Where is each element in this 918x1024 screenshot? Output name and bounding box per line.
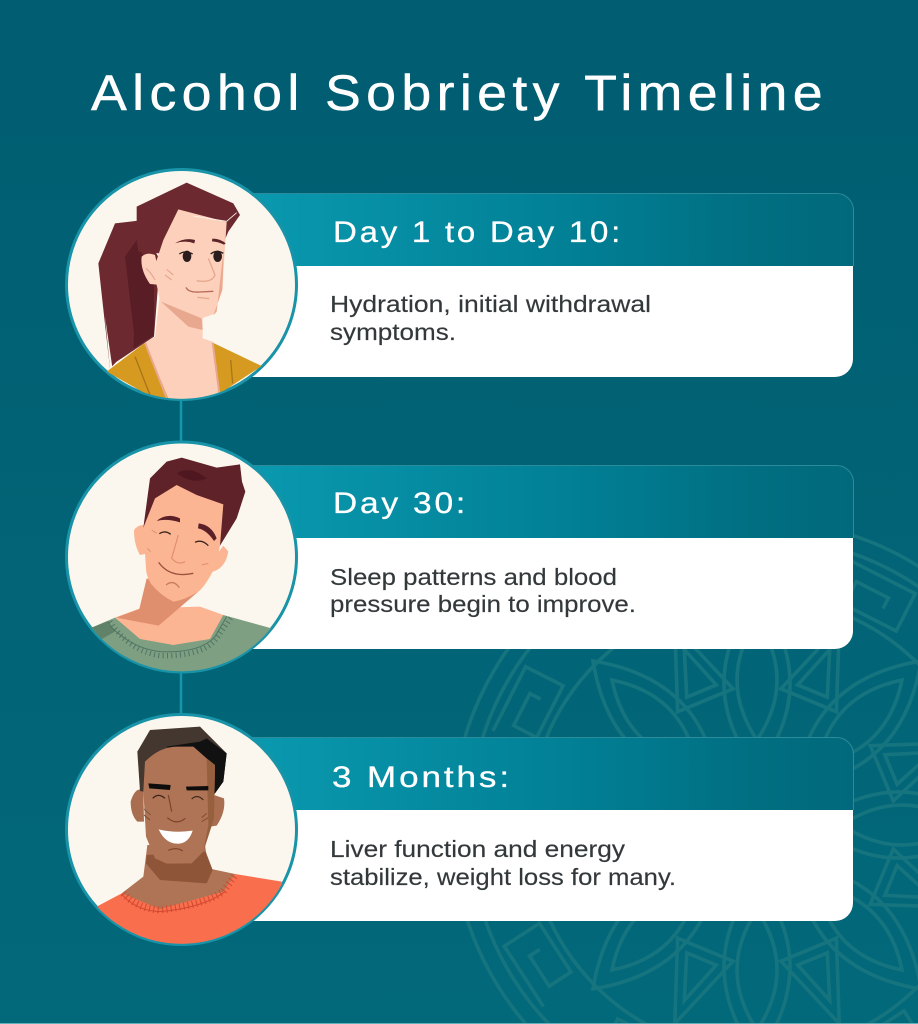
panel: 3 months: 3 Months: xyxy=(332,761,512,794)
panel: day 1 to day 10 xyxy=(240,193,854,377)
panel: day 30: Sleep patterns and blood xyxy=(330,564,617,590)
panel: day 30: Day 30: xyxy=(333,487,468,520)
icon: man with orange sweater portrait xyxy=(66,714,300,948)
title: Alcohol Sobriety Timeline xyxy=(91,65,828,121)
panel: day 30 xyxy=(240,465,854,649)
panel: day 1 to day 10: Hydration, initial withdrawal xyxy=(330,291,651,317)
panel: 3 months: Liver function and energy xyxy=(330,836,626,862)
panel: day 1 to day 10: symptoms. xyxy=(330,319,456,345)
panel: day 1 to day 10: Day 1 to Day 10: xyxy=(333,216,623,249)
icon: man with green sweater portrait xyxy=(66,442,300,678)
icon: woman portrait xyxy=(66,169,296,402)
connector lines xyxy=(180,398,182,716)
panel: 3 months: stabilize, weight loss for many. xyxy=(330,864,676,890)
panel: day 30: pressure begin to improve. xyxy=(330,591,636,617)
bottom edge line xyxy=(0,1023,918,1024)
panel: 3 months xyxy=(240,737,854,921)
